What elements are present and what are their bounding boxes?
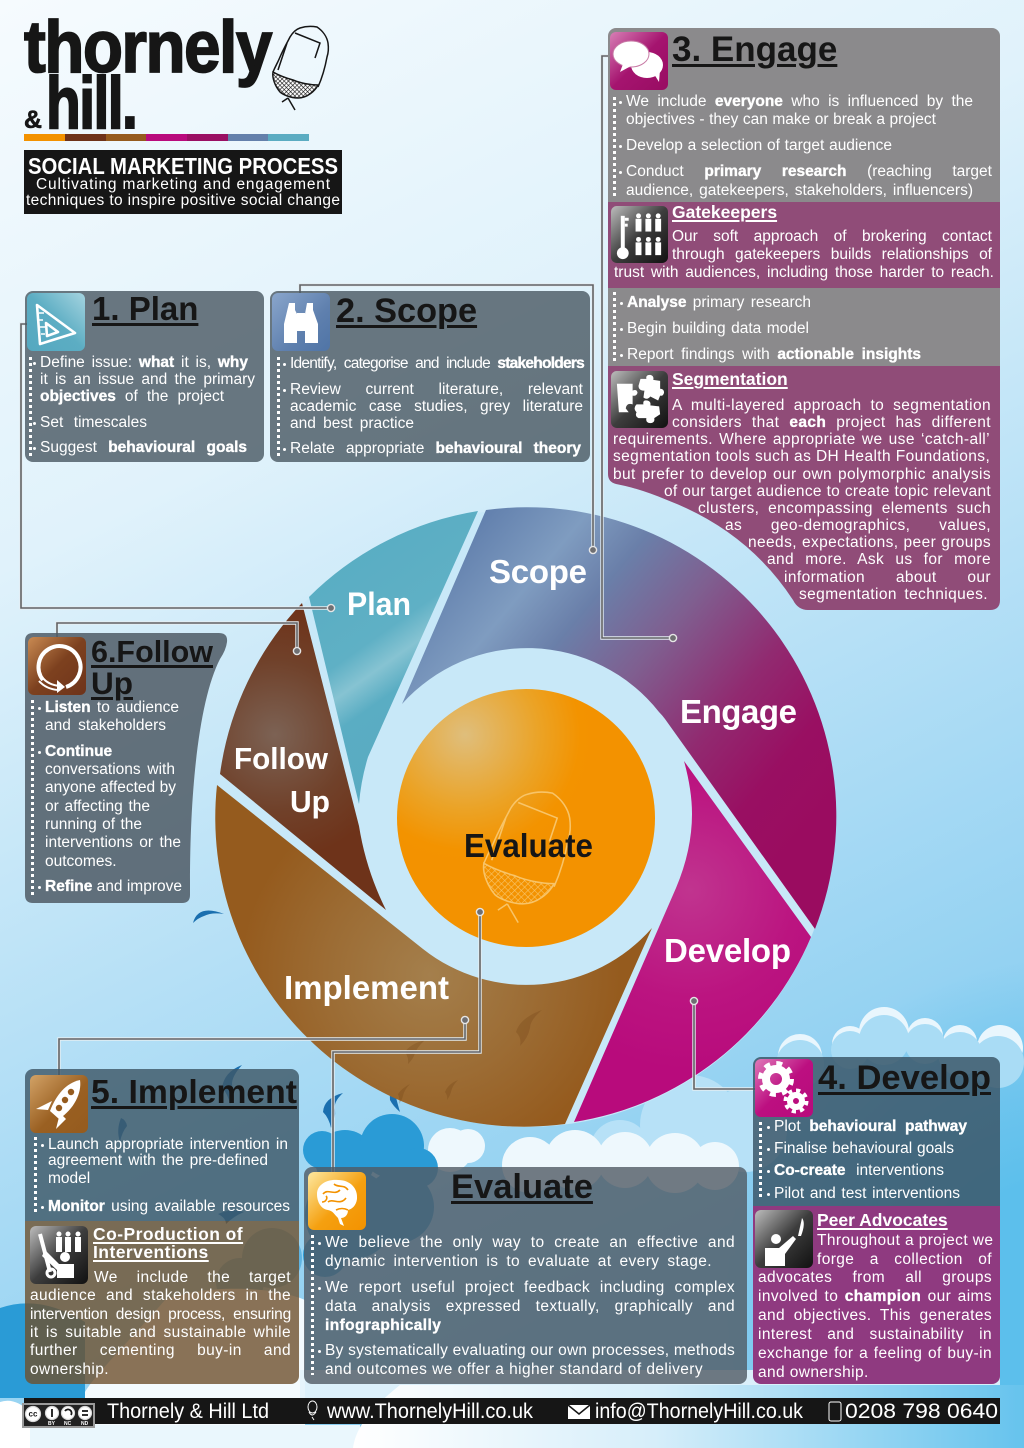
segment: Follow Up [220, 603, 386, 910]
heading: 6.Follow [91, 635, 213, 669]
bullet list [283, 354, 584, 457]
band: Peer Advocates [753, 1206, 1000, 1384]
bullet list: include audiences: Develop a selection of target audience [626, 137, 892, 154]
bullet list: it is an issue and the primary [40, 370, 255, 388]
text block: forge a collection of [817, 1250, 992, 1268]
segment: Implement [215, 785, 652, 1127]
bullet list [33, 354, 255, 456]
bullet list: include audiences: Conduct primary research (reaching target [626, 163, 992, 180]
segment: Implement: Implement [284, 969, 449, 1006]
segment: Develop: Develop [664, 932, 791, 969]
icon: puzzle pieces [611, 371, 668, 428]
text block: but prefer to develop our own polymorphic analysis [613, 466, 991, 483]
bullet list: anyone affected by [45, 779, 176, 796]
text block: A multi-layered approach to segmentation [672, 397, 991, 414]
footer contact bar: Thornely & Hill Ltd [107, 1400, 269, 1423]
bullet list: include audiences: We include everyone who is influenced by the [626, 93, 973, 110]
icon: gears [755, 1059, 813, 1117]
bullet list: Refine and improve [45, 878, 182, 895]
text block: involved to champion our aims [758, 1288, 992, 1305]
sub-heading: Co-Production of [93, 1224, 243, 1244]
logo: thornely & hill [24, 15, 330, 144]
panel: 2. Scope [270, 291, 590, 462]
bullet list: analyse: Report findings with actionable insights [627, 346, 921, 363]
bullet list: dynamic intervention is to evaluate at every stage. [325, 1253, 712, 1270]
text block: and more. Ask us for more [767, 551, 991, 568]
bullet list: objectives of the project [40, 388, 224, 404]
licence badge: NC [64, 1421, 72, 1427]
bullet list: and best practice [290, 414, 414, 432]
bullet list: By systematically evaluating our own processes, methods [325, 1342, 735, 1359]
text block [758, 1232, 993, 1381]
heading: 1. Plan [92, 290, 198, 327]
text block: and objectives. This generates [758, 1307, 992, 1324]
text block: advocates from all groups [758, 1269, 992, 1286]
icon: phone [829, 1402, 841, 1421]
heading: 2. Scope [336, 292, 477, 330]
icon: spanner and people [30, 1226, 88, 1284]
bullet list [318, 1234, 735, 1378]
footer contact bar: www.ThornelyHill.co.uk [326, 1400, 533, 1423]
segment: Scope and Engage: Scope [489, 553, 587, 590]
sub-heading [93, 1224, 244, 1262]
title block: Cultivating marketing and engagement [36, 176, 331, 193]
bullet list: agreement with the pre-defined [48, 1152, 268, 1169]
licence badge [22, 1403, 95, 1428]
bullet list: Define issue: what it is, why [40, 354, 248, 370]
icon: binoculars [272, 293, 330, 351]
text block: segmentation techniques. [799, 586, 988, 603]
segment: Scope and Engage [402, 507, 836, 929]
bullet list: Listen to audience [45, 699, 179, 716]
icon: set square [27, 293, 85, 351]
bullet list [41, 1136, 290, 1215]
bullet list: We believe the only way to create an effective and [325, 1234, 735, 1251]
text block [614, 228, 994, 281]
sub-heading: Gatekeepers [672, 202, 777, 222]
connector lines and nodes [21, 56, 756, 1172]
bullet list: interventions or the [45, 834, 181, 851]
bullet list: data analysis expressed textually, graphically and [325, 1298, 735, 1315]
segment: Scope and Engage: Engage [680, 693, 797, 730]
bullet list: Relate appropriate behavioural theory [290, 440, 581, 456]
panel: Evaluate [304, 1167, 747, 1384]
text block: information about our [784, 569, 991, 586]
text block: further cementing buy-in and [30, 1342, 291, 1359]
bullet list: analyse: Begin building data model [627, 320, 809, 337]
icon: speech bubbles [610, 32, 668, 90]
text block: clusters, encompassing elements such [698, 500, 991, 517]
icon: brain [308, 1172, 366, 1230]
icon: person holding torch [755, 1210, 813, 1268]
icon: rocket [30, 1075, 88, 1133]
text block: segmentation tools such as DH Health Foundations, [613, 448, 990, 465]
text block: as geo-demographics, values, [725, 517, 991, 534]
bullet list: include audiences [619, 93, 992, 199]
footer contact bar: info@ThornelyHill.co.uk [595, 1400, 803, 1423]
heading: 3. Engage [672, 30, 837, 69]
logo: thornely & hill: hill. [46, 62, 136, 144]
icon: acorn [308, 1401, 317, 1420]
band: Gatekeepers [608, 202, 1000, 288]
bullet list: Co-create interventions [774, 1162, 944, 1179]
text block: We include the target [94, 1269, 291, 1286]
bullet list: Review current literature, relevant [290, 380, 583, 398]
bullet list [767, 1118, 968, 1202]
brand colour bar [24, 134, 309, 141]
centre circle: Evaluate: Evaluate [464, 827, 593, 864]
segment: Plan: Plan [347, 586, 411, 622]
bullet list: analyse: Analyse primary research [627, 294, 811, 311]
bullet list: Identify, categorise and include stakeholders [290, 354, 584, 372]
bullet list: include audiences: audience, gatekeepers, stakeholders, influencers) [626, 182, 973, 199]
bullet list: and stakeholders [45, 717, 166, 734]
text block: exchange for a feeling of buy-in [758, 1345, 992, 1362]
segment: Plan [309, 511, 478, 804]
footer contact bar [22, 1398, 1000, 1428]
sub-heading: Segmentation [672, 369, 788, 389]
bullet list: conversations with [45, 761, 175, 778]
licence badge: cc [28, 1410, 38, 1418]
text block: considers that each project has different [672, 414, 991, 431]
segment: Follow Up: Up [290, 784, 330, 819]
text block: requirements. Where appropriate we use ‘catch-all’ [613, 431, 990, 448]
bullet list: Pilot and test interventions [774, 1185, 960, 1202]
text block: of our target audience to create topic relevant [664, 483, 991, 500]
bullet list: include audiences: objectives - they can make or break a project [626, 111, 936, 128]
bullet list: running of the [45, 816, 142, 833]
licence badge: ND [81, 1421, 89, 1427]
bullet list: Suggest behavioural goals [40, 438, 247, 456]
sub-heading: Peer Advocates [817, 1210, 948, 1230]
heading: Evaluate [451, 1168, 593, 1206]
panel: 1. Plan [25, 291, 264, 462]
text block: intervention design process, ensuring [30, 1306, 291, 1323]
heading: 5. Implement [91, 1073, 297, 1111]
bullet list: Finalise behavioural goals [774, 1140, 954, 1157]
icon: key and people [611, 206, 668, 263]
bullet list: analyse [620, 294, 921, 363]
heading: 4. Develop [818, 1059, 991, 1097]
bullet list: Plot behavioural pathway [774, 1118, 967, 1135]
panel: 5. Implement [25, 1069, 299, 1384]
band: Co-Production of Interventions [25, 1221, 299, 1384]
text block: interest and sustainability in [758, 1326, 992, 1343]
segment: Develop [574, 761, 811, 1122]
icon: envelope [568, 1405, 590, 1419]
bullet list: model [48, 1170, 90, 1187]
bullet list: infographically [325, 1317, 441, 1334]
centre circle: Evaluate [397, 689, 655, 947]
text block: trust with audiences, including those harder to reach. [614, 264, 994, 281]
sub-heading: Interventions [93, 1242, 209, 1262]
text block: Throughout a project we [817, 1232, 993, 1248]
segment: Follow Up: Follow [234, 741, 329, 776]
text block [30, 1269, 291, 1378]
text block: it is suitable and sustainable while [30, 1324, 291, 1341]
bullet list: Set timescales [40, 414, 147, 430]
icon: loop arrows [28, 637, 86, 695]
bullet list: and outcomes we offer a higher standard of delivery [325, 1361, 703, 1378]
bullet list: Continue [45, 743, 112, 760]
panel: 4. Develop [753, 1057, 1000, 1384]
band: Segmentation [608, 366, 1000, 610]
bullet list: outcomes. [45, 853, 117, 870]
text block: Our soft approach of brokering contact [672, 228, 992, 245]
bullet list [38, 700, 182, 894]
text block: and ownership. [758, 1364, 869, 1381]
licence badge: BY [48, 1421, 56, 1427]
bullet list: We report useful project feedback including complex [325, 1279, 735, 1296]
text block: ownership. [30, 1361, 109, 1378]
bullet list: Launch appropriate intervention in [48, 1136, 288, 1153]
bullet list: or affecting the [45, 798, 150, 815]
text block: audience and stakeholders in the [30, 1287, 291, 1304]
title block: techniques to inspire positive social change [26, 192, 340, 209]
heading: Up [91, 665, 133, 701]
footer contact bar: 0208 798 0640 [845, 1400, 998, 1423]
bullet list: Monitor using available resources [48, 1198, 290, 1215]
text block: through gatekeepers builds relationships of [672, 246, 992, 263]
text block: needs, expectations, peer groups [748, 534, 991, 551]
heading [91, 640, 213, 700]
title block [24, 150, 342, 214]
panel: 6. Follow Up [25, 633, 228, 903]
panel: 3. Engage [608, 28, 1000, 610]
logo: thornely & hill: & [24, 106, 42, 134]
text block [614, 398, 991, 602]
bullet list: academic case studies, grey literature [290, 398, 583, 414]
